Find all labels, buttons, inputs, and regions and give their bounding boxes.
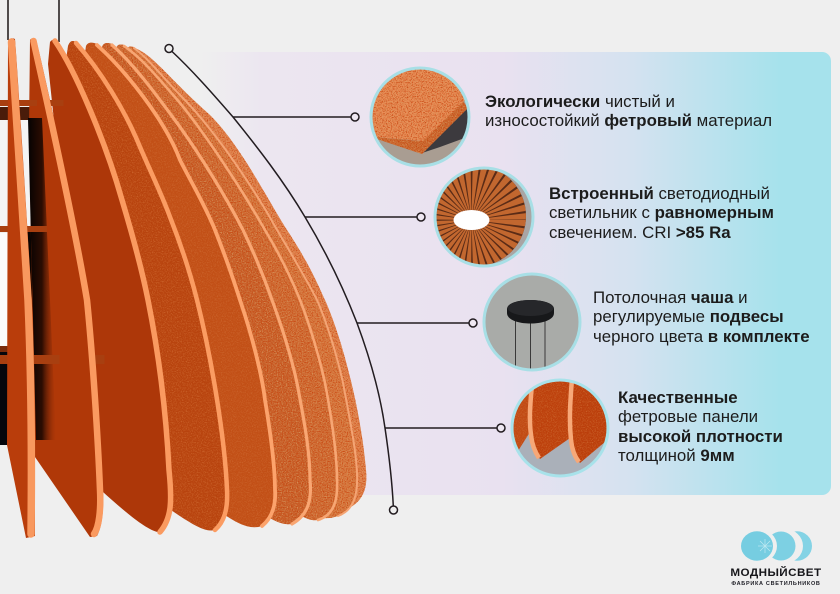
- suspension wires: [8, 0, 59, 42]
- text: canopy: черного цвета в комплекте: [593, 327, 810, 346]
- connector: panels: [385, 424, 505, 432]
- blade 1: [7, 38, 35, 538]
- photo: high density panels: [510, 378, 612, 478]
- text: material: износостойкий фетровый материал: [485, 111, 772, 130]
- connector: light: [305, 213, 425, 221]
- blade 6: [102, 43, 310, 524]
- blade 2 inner shadow: [28, 118, 56, 440]
- curve end top: [165, 44, 173, 52]
- blade 4: [66, 41, 227, 531]
- curve end bottom: [390, 506, 398, 514]
- photo: built-in LED light: [434, 167, 534, 267]
- text: panels: высокой плотности: [618, 427, 783, 446]
- logo name: МОДНЫЙСВЕТ: [730, 566, 822, 578]
- blade 3: [48, 40, 171, 532]
- text: panels: Качественные: [618, 388, 738, 407]
- logo tagline: ФАБРИКА СВЕТИЛЬНИКОВ: [731, 580, 821, 586]
- logo: [730, 531, 822, 586]
- photo: ceiling canopy and wires: [484, 274, 580, 370]
- connector: canopy: [357, 319, 477, 327]
- crossbar stubs behind blade 2: [40, 100, 104, 364]
- panel: gradient background: [200, 52, 831, 495]
- text: light: [549, 184, 774, 242]
- inner frame background: [0, 107, 40, 445]
- logo mark: [741, 531, 812, 561]
- text: panels: [618, 388, 783, 465]
- felt blades: [48, 40, 366, 532]
- blade 9 outer: [128, 47, 366, 514]
- text: panels: фетровые панели: [618, 407, 758, 426]
- text: canopy: регулируемые подвесы: [593, 307, 784, 326]
- text: canopy: [593, 288, 810, 346]
- blade 7: [116, 44, 337, 520]
- blade 5: [84, 43, 275, 527]
- text: light: светильник с равномерным: [549, 203, 774, 222]
- photo: felt material: [370, 66, 470, 168]
- callout curve: [165, 44, 505, 514]
- text: light: Встроенный светодиодный: [549, 184, 770, 203]
- blade 2: [29, 38, 103, 537]
- text: panels: толщиной 9мм: [618, 446, 735, 465]
- lamp illustration: [0, 0, 366, 538]
- text: light: свечением. CRI >85 Ra: [549, 223, 731, 242]
- blade 8: [127, 46, 357, 518]
- crossbars: [0, 100, 60, 364]
- text: canopy: Потолочная чаша и: [593, 288, 748, 307]
- connector: material: [233, 113, 359, 121]
- text: material: Экологически чистый и: [485, 92, 675, 111]
- text: material: [485, 92, 772, 130]
